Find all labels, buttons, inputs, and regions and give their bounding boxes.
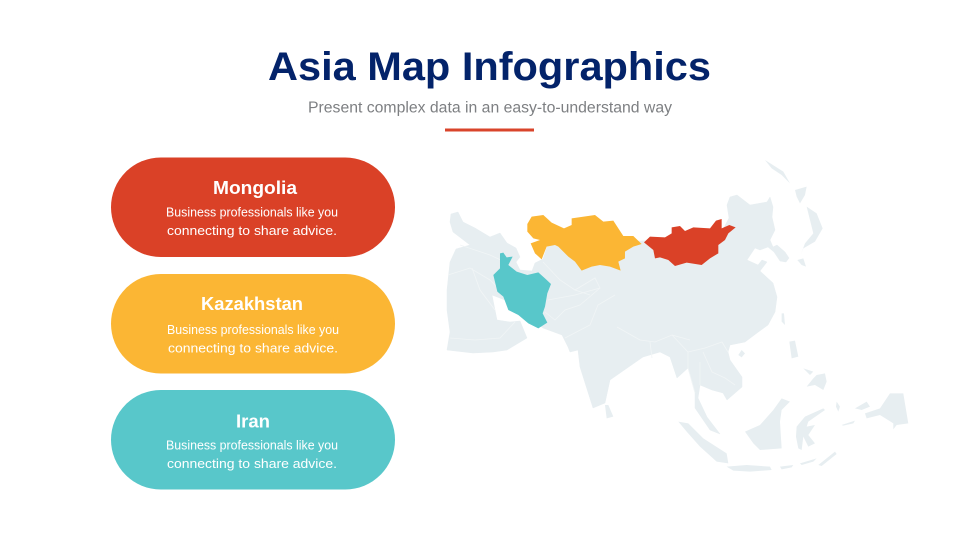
map of Asia bbox=[447, 160, 908, 472]
Mongolia heading: Mongolia bbox=[213, 178, 298, 198]
map: Kazakhstan bbox=[527, 215, 642, 271]
country borders bbox=[448, 245, 735, 393]
title accent bar bbox=[445, 128, 534, 132]
panel: Kazakhstan bbox=[111, 274, 395, 374]
title: Asia Map Infographics bbox=[268, 45, 711, 89]
map: Iran bbox=[493, 253, 551, 328]
Southeast Asia islands bbox=[605, 313, 908, 472]
Iran description: connecting to share advice. bbox=[167, 457, 337, 471]
panel: Mongolia bbox=[111, 158, 395, 257]
Iran description: Business professionals like you bbox=[166, 439, 338, 453]
Kazakhstan heading: Kazakhstan bbox=[201, 294, 303, 314]
map: Mongolia bbox=[644, 219, 736, 266]
Kazakhstan description: Business professionals like you bbox=[167, 323, 339, 337]
Kazakhstan description: connecting to share advice. bbox=[168, 342, 338, 356]
subtitle: Present complex data in an easy-to-understand way bbox=[308, 100, 672, 116]
Japan and Sakhalin bbox=[765, 160, 823, 267]
panel: Iran bbox=[111, 390, 395, 490]
mainland Asia bbox=[447, 195, 789, 434]
Mongolia description: Business professionals like you bbox=[166, 206, 338, 220]
Mongolia description: connecting to share advice. bbox=[167, 224, 337, 238]
islands bbox=[605, 160, 908, 472]
Iran heading: Iran bbox=[236, 412, 270, 432]
